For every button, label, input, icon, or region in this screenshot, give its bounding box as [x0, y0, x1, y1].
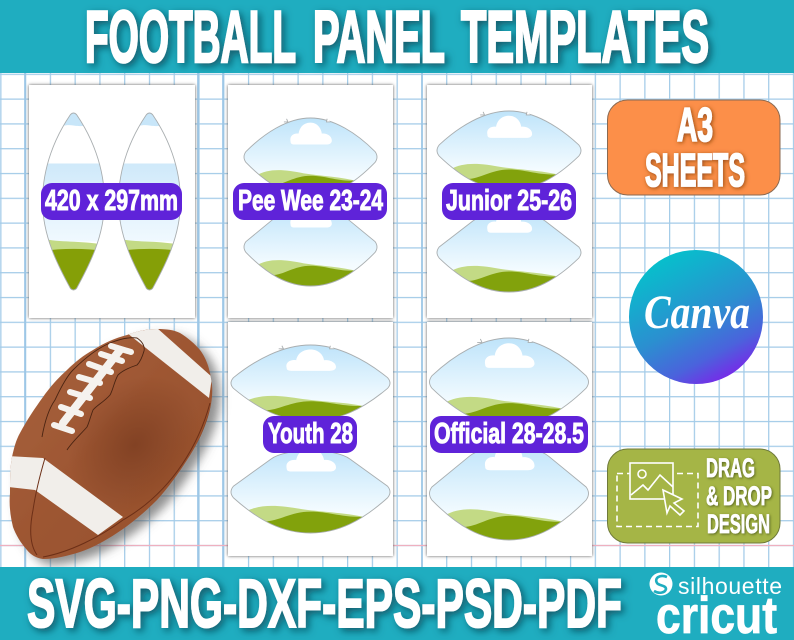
football illustration [8, 328, 229, 575]
label: Pee Wee 23-24 [233, 183, 387, 220]
panel: Youth 28 [227, 322, 394, 556]
label: 420 x 297mm: 420 x 297mm [45, 185, 178, 217]
label: Official 28-28.5: Official 28-28.5 [434, 418, 584, 450]
lace seam outline [42, 338, 144, 450]
panel: Official 28-28.5 [426, 322, 592, 556]
template pieces: Official [426, 336, 592, 542]
label: Junior 25-26: Junior 25-26 [446, 185, 572, 217]
template pieces: Junior [433, 109, 585, 294]
title [85, 0, 709, 78]
panel: Junior 25-26 [427, 85, 592, 318]
template pieces: Youth [227, 343, 394, 535]
badge: Canva logo: Canva [644, 286, 750, 339]
label: Junior 25-26 [442, 183, 576, 220]
badge: A3 sheets [608, 98, 780, 196]
icon: image dragged into dashed box [617, 463, 698, 526]
text: drag & drop design [706, 453, 772, 539]
silhouette wordmark: silhouette [678, 573, 782, 599]
label: Pee Wee 23-24: Pee Wee 23-24 [238, 185, 383, 217]
label: Youth 28: Youth 28 [268, 418, 353, 450]
badge: A3 sheets: A3 [677, 98, 713, 151]
label: Official 28-28.5 [430, 416, 588, 453]
panel: Pee Wee 23-24 [228, 85, 393, 318]
laces [54, 346, 131, 431]
icon: silhouette logo [650, 572, 672, 596]
white stripes [8, 328, 212, 535]
template pieces: Pee Wee [241, 116, 380, 288]
template pieces: tall leaf panels [38, 110, 184, 294]
text: drag & drop design: DRAG [706, 453, 755, 483]
label: 420 x 297mm [41, 183, 182, 220]
badge: Canva logo [629, 250, 763, 384]
label: Youth 28 [263, 416, 357, 453]
top title banner [0, 0, 794, 78]
badge: drag and drop design [608, 449, 780, 543]
panel: 420 x 297mm sheet [29, 85, 195, 318]
bottom banner [0, 565, 794, 640]
